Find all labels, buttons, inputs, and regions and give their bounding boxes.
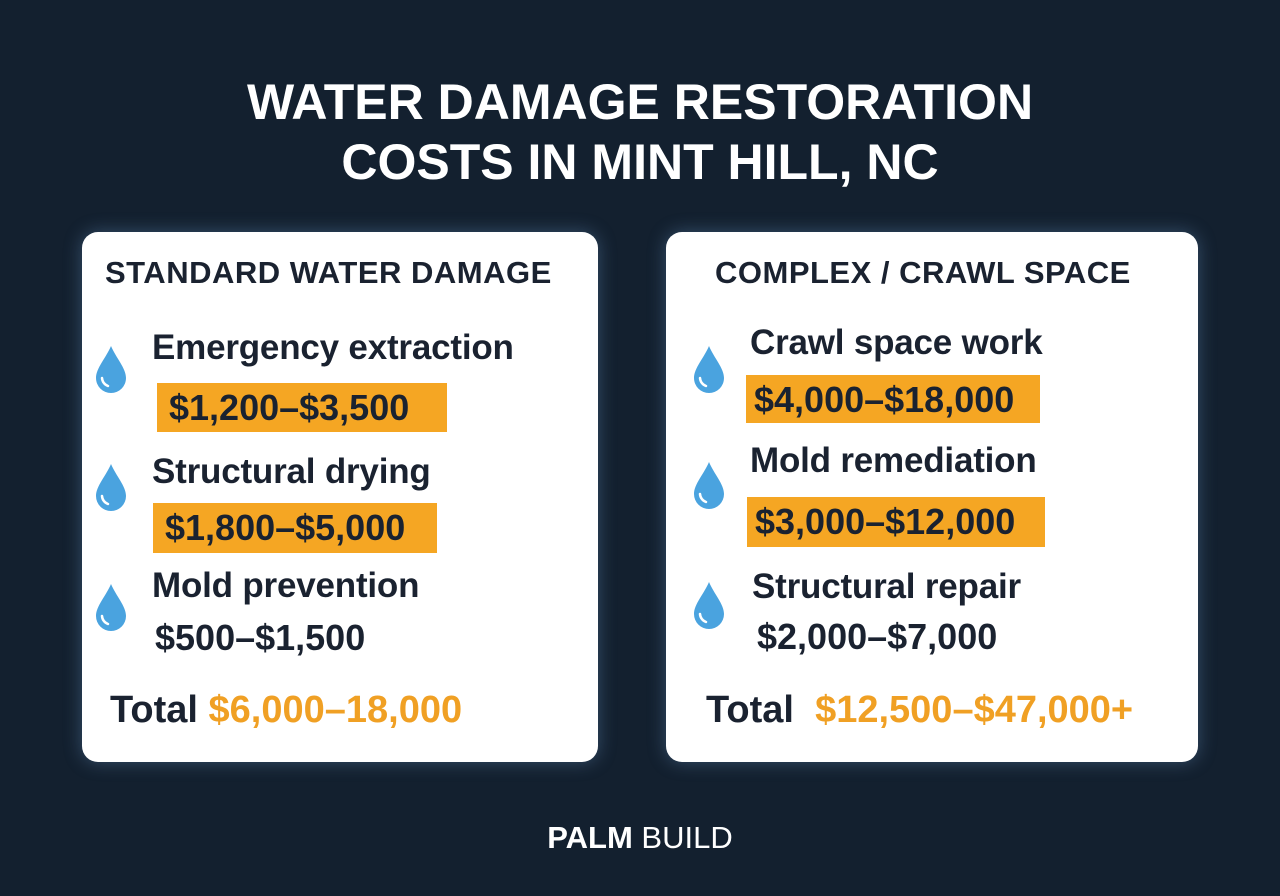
item: crawl space work: Crawl space work	[750, 323, 1042, 362]
icon: water drop 6	[694, 582, 724, 629]
price box 5: $3,000–$12,000	[755, 501, 1015, 542]
icon: water drop 5	[694, 462, 724, 509]
icon: water drop 3	[96, 584, 126, 631]
heading: standard: STANDARD WATER DAMAGE	[105, 255, 552, 290]
item: structural repair: Structural repair	[752, 567, 1021, 606]
heading: complex: COMPLEX / CRAWL SPACE	[715, 255, 1131, 290]
title	[247, 74, 1033, 190]
panel: complex crawl space	[666, 232, 1198, 762]
price 6: $2,000–$7,000	[757, 616, 997, 657]
item: structural drying: Structural drying	[152, 452, 431, 491]
item: emergency extraction: Emergency extraction	[152, 328, 514, 367]
title: WATER DAMAGE RESTORATION	[247, 74, 1033, 130]
price box 2: $1,800–$5,000	[165, 507, 405, 548]
price box 4: $4,000–$18,000	[754, 379, 1014, 420]
icon: water drop 1	[96, 346, 126, 393]
price box 1: $1,200–$3,500	[169, 387, 409, 428]
panel: standard water damage	[82, 232, 598, 762]
title: COSTS IN MINT HILL, NC	[341, 134, 939, 190]
price box 2	[153, 503, 437, 553]
total: standard: Total $6,000–18,000	[110, 689, 462, 731]
item: mold prevention: Mold prevention	[152, 566, 419, 605]
item: mold remediation: Mold remediation	[750, 441, 1037, 480]
total: complex: Total $12,500–$47,000+	[706, 689, 1133, 731]
footer brand: PALM BUILD	[547, 820, 733, 855]
price 3: $500–$1,500	[155, 617, 365, 658]
icon: water drop 4	[694, 346, 724, 393]
price box 1	[157, 383, 447, 432]
icon: water drop 2	[96, 464, 126, 511]
